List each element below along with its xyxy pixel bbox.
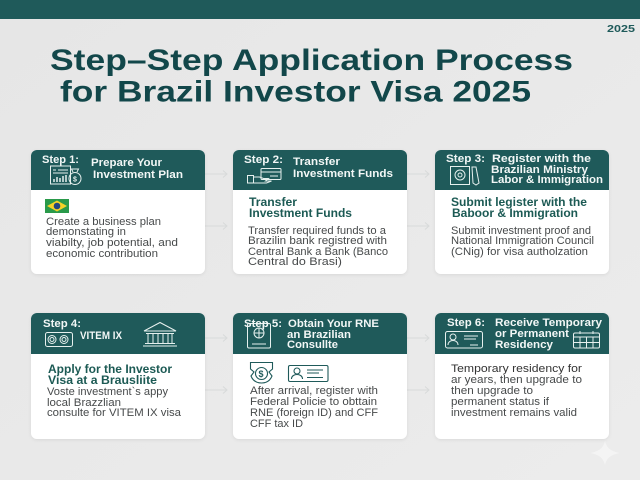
step 1 header text: Prepare Your	[91, 157, 163, 169]
step 5 body text: RNE (foreign ID) and CFF	[250, 407, 378, 419]
step 3 header text: Step 3:	[446, 153, 485, 165]
step 5 body text: Federal Policie to obttain	[250, 396, 377, 408]
step 3 header text	[446, 153, 603, 186]
step 4 subheading: Apply for the Investor	[48, 364, 173, 376]
icon: ID card	[288, 366, 328, 382]
connector arrows: step 2 to 3	[407, 170, 429, 230]
panel: step 1	[31, 150, 205, 274]
title	[50, 44, 573, 108]
panel: step 4	[31, 313, 205, 439]
step 4 body text: consulte for VITEM IX visa	[47, 407, 182, 419]
step 1 body text: Create a business plan	[46, 216, 161, 228]
icon: business plan and money bag	[50, 166, 81, 184]
step 3 body text: Submit investment proof and	[451, 225, 591, 237]
step 3 header text: Brazilian Ministry	[491, 164, 589, 176]
icon: bank building	[143, 322, 177, 346]
step 6 header text: Step 6:	[447, 317, 485, 329]
title: for Brazil Investor Visa 2025	[60, 76, 531, 108]
step 6 body text: ar years, then upgrade to	[451, 374, 582, 386]
step 5 header text: Obtain Your RNE	[288, 318, 379, 330]
step 1 body text: economic contribution	[46, 248, 158, 260]
title: Step–Step Application Process	[50, 44, 573, 77]
step 5 body text	[250, 385, 378, 430]
step 3 body text	[451, 225, 594, 258]
step 2 header text	[244, 154, 393, 180]
step 5 header text: Step 5:	[244, 318, 282, 330]
connector arrows: row 1 to 2	[205, 170, 227, 230]
step 3 subheading: Submit legister with the	[451, 197, 587, 209]
step 3 header text: Labor & Immigration	[491, 174, 603, 186]
step 2 subheading	[249, 197, 352, 220]
step 6 body text	[451, 363, 582, 419]
step 2 header text: Step 2:	[244, 154, 283, 166]
icon: hand holding card	[248, 168, 281, 183]
step 1 header text	[42, 154, 183, 181]
step 5 body text: After arrival, register with	[250, 385, 378, 397]
step 6 header text: or Permanent	[495, 328, 569, 340]
icon: sparkle	[590, 441, 620, 465]
step 4 header text: VITEM IX	[80, 330, 123, 342]
step 4 header text	[43, 318, 123, 342]
step 2 subheading: Transfer	[249, 197, 298, 209]
connector arrows: step 5 to 6	[407, 334, 429, 394]
icon: business plan and money bag: $	[73, 176, 77, 184]
panel: step 2	[233, 150, 407, 274]
step 5 header text: an Brazilian	[287, 329, 351, 341]
step 1 body text: viabilty, job potential, and	[46, 237, 178, 249]
icon: Brazil flag	[45, 199, 69, 213]
step 6 body text: permanent status if	[451, 396, 550, 408]
step 6 header text: Residency	[495, 339, 554, 351]
step 2 header text: Transfer	[293, 156, 341, 168]
step 4 header text: Step 4:	[43, 318, 81, 330]
icon: money shield: $	[258, 369, 264, 379]
step 5 header text: Consullte	[287, 339, 338, 351]
step 2 body text: Brazilin bank registred with	[248, 235, 387, 247]
step 1 header text: Step 1:	[42, 154, 79, 166]
icon: residency card	[446, 332, 482, 348]
step 2 body text: Central do Brasi)	[248, 256, 342, 268]
step 4 body text: local Brazzlian	[47, 397, 121, 409]
icon: visa card	[46, 332, 72, 346]
step 6 body text: then upgrade to	[451, 385, 533, 397]
step 2 body text: Transfer required funds to a	[248, 225, 387, 237]
panel: step 6	[435, 313, 609, 439]
top banner	[0, 0, 640, 19]
step 1 body text	[46, 216, 178, 260]
step 6 body text: Temporary residency for	[451, 363, 582, 375]
step 3 subheading	[451, 197, 587, 220]
step 6 body text: investment remains valid	[451, 407, 577, 419]
icon: calendar	[574, 331, 600, 348]
step 4 subheading: Visa at a Brausliite	[48, 375, 157, 387]
icon: money shield	[250, 362, 272, 383]
step 2 body text: Central Bank a Bank (Banco	[248, 246, 388, 258]
panel: step 3	[435, 150, 609, 274]
step 3 header text: Register with the	[492, 153, 591, 165]
step 3 body text: (CNig) for visa autholzation	[451, 246, 588, 258]
step 6 header text	[447, 317, 603, 351]
step 5 header text	[244, 318, 379, 351]
step 4 subheading	[48, 364, 173, 387]
icon: passport	[248, 324, 270, 348]
connector arrows: step 4 to 5	[205, 334, 227, 394]
step 3 subheading: Baboor & Immigration	[452, 208, 578, 220]
step 3 body text: National Immigration Council	[451, 235, 594, 247]
step 1 body text: demonstating in	[46, 226, 126, 238]
step 4 body text: Voste investment`s appy	[47, 386, 169, 398]
panel: step 5	[233, 313, 407, 439]
icon: ministry document and seal	[450, 166, 479, 185]
step 6 header text: Receive Temporary	[495, 317, 603, 329]
year tag: 2025	[607, 23, 635, 35]
step 2 subheading: Investment Funds	[249, 208, 352, 220]
step 4 body text	[47, 386, 182, 419]
step 2 body text	[248, 225, 388, 268]
step 2 header text: Investment Funds	[293, 168, 393, 180]
step 5 body text: CFF tax ID	[250, 418, 303, 430]
step 1 header text: Investment Plan	[93, 169, 183, 181]
